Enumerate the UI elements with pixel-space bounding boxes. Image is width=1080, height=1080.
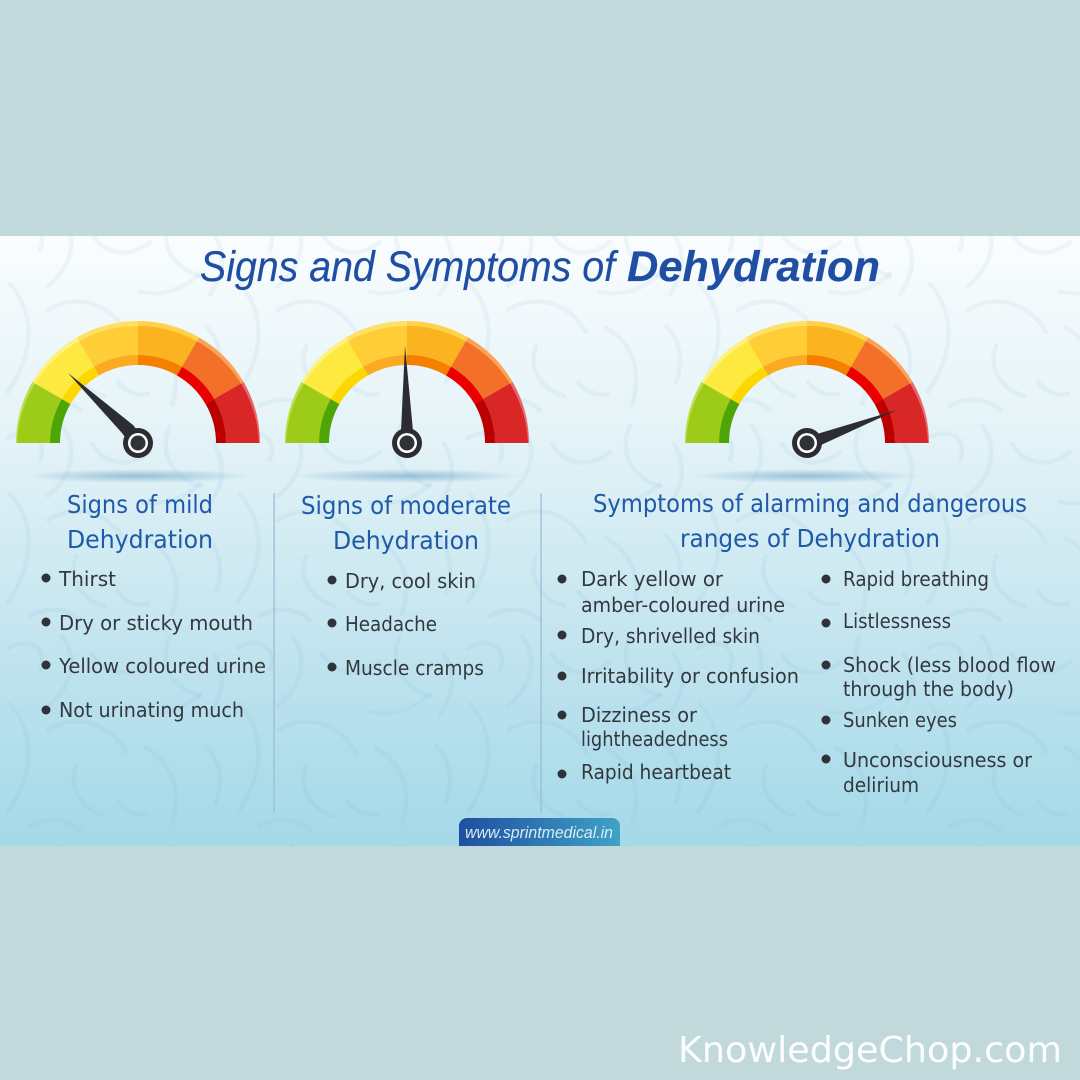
list: mild signs: Not urinating much [59,698,244,722]
column: alarming [558,489,1056,797]
list: alarming symptoms right: delirium [843,773,919,797]
heading: alarming: ranges of Dehydration [680,524,940,553]
list: mild signs: Yellow coloured urine [58,654,266,678]
list: mild signs: Dry or sticky mouth [59,611,253,635]
list: moderate signs [328,569,484,680]
list: alarming symptoms left: Dry, shrivelled skin [581,624,760,648]
heading: alarming: Symptoms of alarming and dangerous [593,489,1027,518]
heading: moderate [301,491,511,555]
heading: moderate: Signs of moderate [301,491,511,520]
list: alarming symptoms left: Dizziness or [581,703,698,727]
heading: mild: Signs of mild [67,490,213,519]
divider [540,493,542,813]
list: alarming symptoms left: Irritability or confusion [581,664,799,688]
heading: alarming [593,489,1027,553]
column: moderate [301,491,511,680]
list: mild signs: Thirst [58,567,116,591]
gauge: mild [16,321,260,483]
divider [274,493,275,813]
heading: moderate: Dehydration [333,526,479,555]
column: mild [42,490,266,722]
list: alarming symptoms left [558,567,799,784]
title: Signs and Symptoms of [200,243,619,291]
list: alarming symptoms right [822,567,1056,797]
list: alarming symptoms right: Sunken eyes [843,708,957,732]
heading: mild [67,490,213,554]
list: alarming symptoms left: lightheadedness [581,727,728,751]
list: alarming symptoms right: Listlessness [843,609,951,633]
title: Dehydration [627,243,880,291]
watermark: KnowledgeChop.com [678,1030,1062,1071]
list: alarming symptoms left: Rapid heartbeat [581,760,731,784]
list: alarming symptoms left: amber-coloured urine [581,593,785,617]
list: alarming symptoms right: through the body) [843,677,1014,701]
gauge: moderate [285,321,529,483]
website badge: www.sprintmedical.in [465,823,613,842]
list: mild signs [42,567,266,722]
panel: infographic background [0,236,1080,846]
list: moderate signs: Muscle cramps [345,656,484,680]
list: alarming symptoms right: Rapid breathing [843,567,989,591]
list: alarming symptoms right: Unconsciousness or [843,748,1033,772]
list: moderate signs: Headache [345,612,437,636]
list: moderate signs: Dry, cool skin [345,569,476,593]
heading: mild: Dehydration [67,525,213,554]
list: alarming symptoms left: Dark yellow or [581,567,724,591]
gauge: alarming [685,321,929,483]
list: alarming symptoms right: Shock (less blood flow [843,653,1056,677]
website badge [459,818,620,846]
